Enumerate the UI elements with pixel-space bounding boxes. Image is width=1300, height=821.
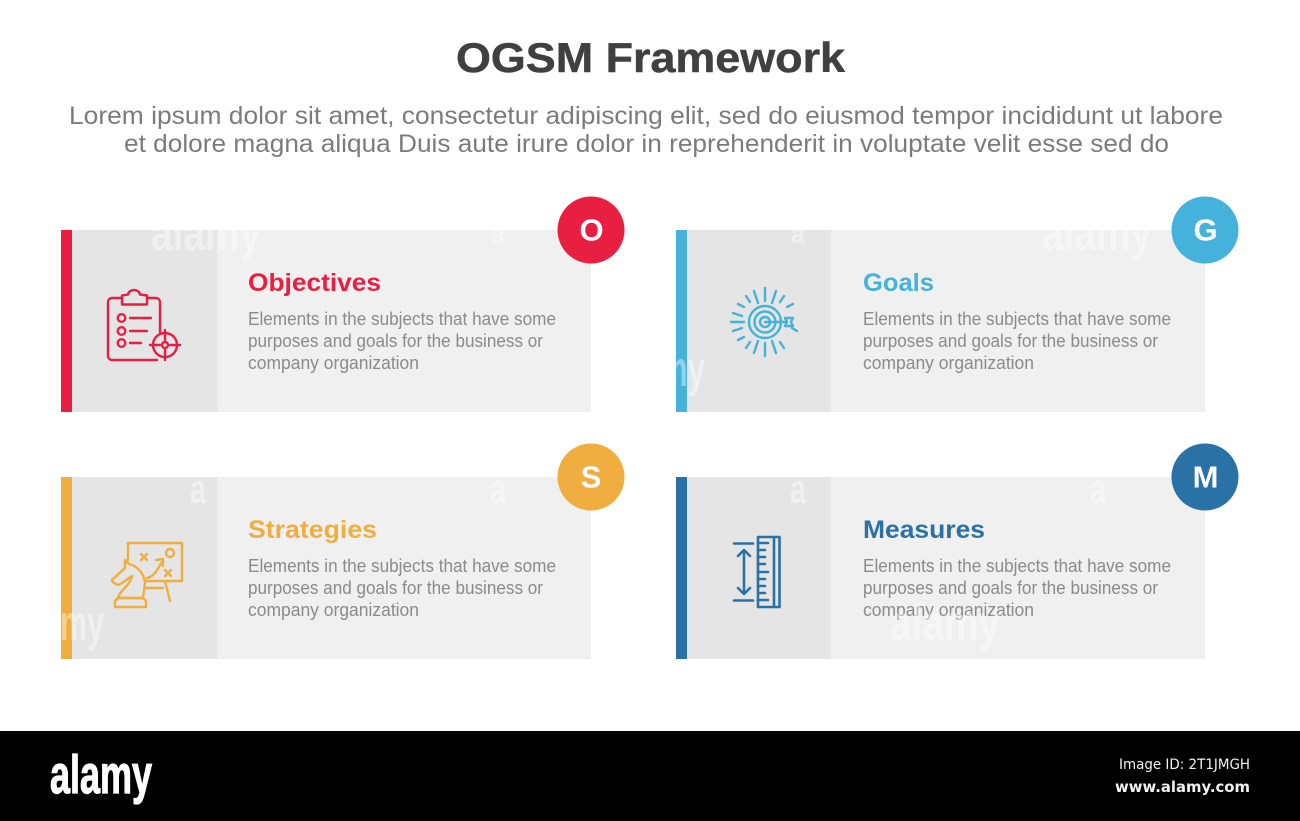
watermarks: a: [491, 219, 506, 249]
description: goals: [863, 309, 1171, 373]
heading: objectives: Objectives: [248, 269, 381, 297]
badge: G: [1172, 196, 1238, 264]
badge: S: S: [581, 460, 601, 494]
icon: clipboard with target: [108, 290, 180, 360]
watermarks: a: [791, 219, 806, 249]
description: strategies: company organization: [248, 600, 419, 620]
watermarks: alamy: [151, 205, 261, 261]
description: measures: Elements in the subjects that have some: [863, 556, 1171, 576]
description: goals: purposes and goals for the business or: [863, 331, 1158, 351]
title: OGSM Framework: [456, 34, 846, 81]
footer logo: alamy: [50, 745, 152, 805]
description: measures: purposes and goals for the business or: [863, 578, 1158, 598]
badge: M: [1172, 444, 1238, 510]
badge: G: G: [1193, 212, 1218, 248]
panel: goals: [676, 196, 1238, 412]
description: objectives: Elements in the subjects that have some: [248, 309, 556, 329]
icon: target with rays: [731, 288, 797, 356]
panel: measures: [676, 444, 1238, 659]
description: goals: company organization: [863, 353, 1034, 373]
website: www.alamy.com: [1115, 778, 1250, 796]
badge: S: [558, 444, 624, 510]
watermarks: a: [490, 465, 506, 512]
panel: strategies: [61, 444, 624, 659]
description: measures: company organization: [863, 600, 1034, 620]
description: goals: Elements in the subjects that have some: [863, 309, 1171, 329]
description: strategies: [248, 556, 556, 620]
description: strategies: purposes and goals for the business or: [248, 578, 543, 598]
badge: M: M: [1193, 460, 1218, 494]
image id: Image ID: 2T1JMGH: [1119, 757, 1250, 773]
watermarks: a: [190, 465, 206, 512]
subtitle text: et dolore magna aliqua Duis aute irure dolor in reprehenderit in voluptate velit esse sed do: [124, 130, 1169, 158]
heading: measures: Measures: [863, 516, 985, 544]
heading: strategies: Strategies: [248, 516, 377, 544]
description: measures: [863, 556, 1171, 620]
watermarks: alamy: [890, 595, 1000, 651]
badge: O: O: [579, 212, 604, 248]
description: strategies: Elements in the subjects that have some: [248, 556, 556, 576]
watermarks: my: [660, 341, 705, 397]
panel: objectives: [61, 196, 624, 412]
watermarks: my: [60, 595, 104, 651]
icon: chess knight and strategy board: [112, 543, 182, 607]
description: objectives: company organization: [248, 353, 419, 373]
watermarks: alamy: [1042, 205, 1152, 261]
icon: ruler and height arrow: [734, 537, 780, 607]
subtitle text: [69, 102, 1223, 158]
watermarks: [60, 205, 1152, 651]
badge: O: [558, 196, 624, 264]
watermarks: a: [790, 465, 806, 512]
subtitle text: Lorem ipsum dolor sit amet, consectetur adipiscing elit, sed do eiusmod tempor incididunt ut labore: [69, 102, 1223, 130]
watermarks: a: [1090, 465, 1106, 512]
heading: goals: Goals: [863, 269, 934, 297]
footer bar: [0, 731, 1300, 821]
description: objectives: purposes and goals for the business or: [248, 331, 543, 351]
description: objectives: [248, 309, 556, 373]
